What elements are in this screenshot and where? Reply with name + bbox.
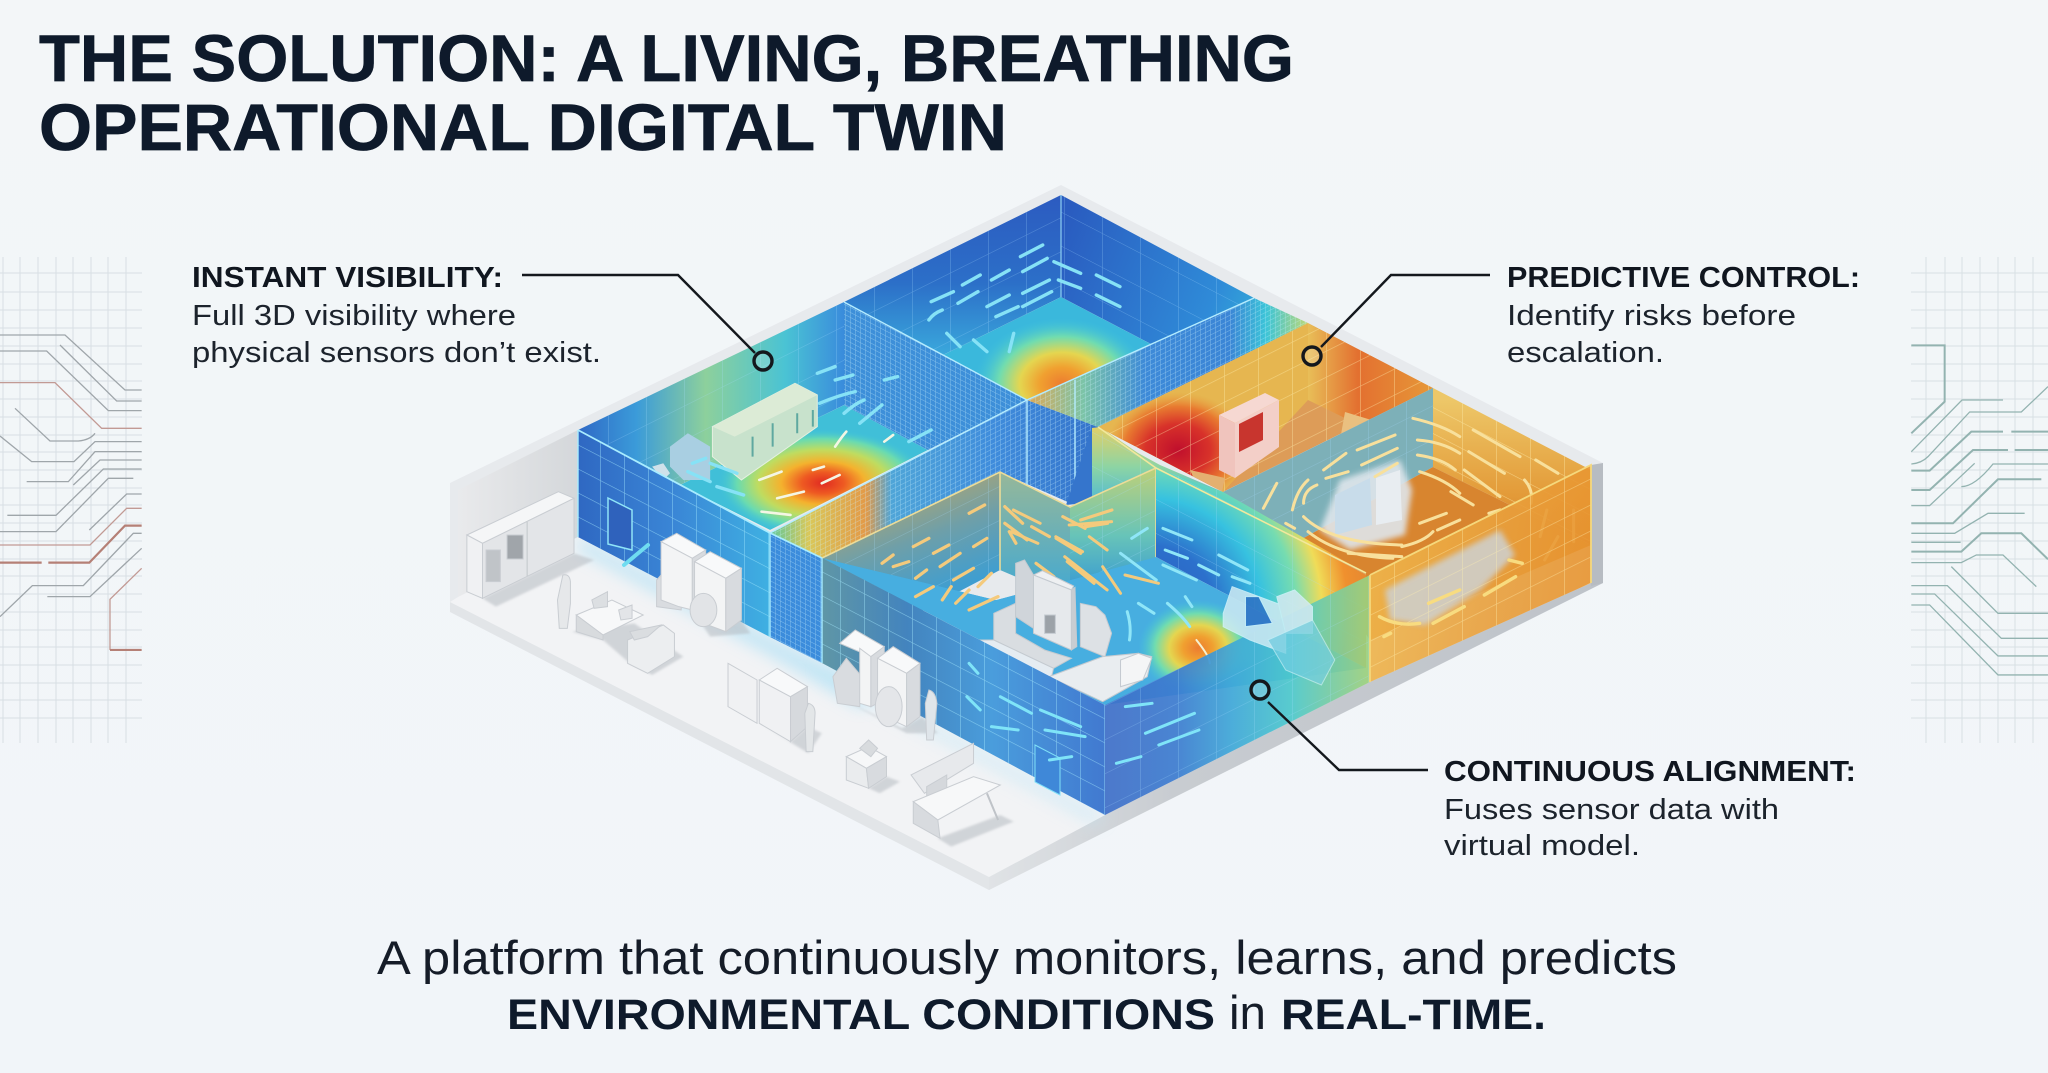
server cabinets xyxy=(467,492,574,598)
title: OPERATIONAL DIGITAL TWIN xyxy=(39,90,1007,164)
front-right wall with grid xyxy=(1105,575,1370,815)
lab table xyxy=(576,592,674,673)
bottom statement: A platform that continuously monitors, learns, and predicts xyxy=(377,931,1677,984)
callout: continuous alignment xyxy=(1251,681,1856,862)
callout: predictive control: escalation. xyxy=(1507,337,1664,369)
twin refrigerators near wall xyxy=(657,533,741,632)
cyan arrows on the front wall xyxy=(967,663,1199,763)
bottom statement xyxy=(377,931,1677,1039)
room B floor hotspot xyxy=(944,297,1150,400)
bottom statement: in xyxy=(1229,986,1266,1039)
room E airflow arrows xyxy=(1263,418,1574,560)
bottom statement: REAL-TIME. xyxy=(1281,991,1546,1039)
title xyxy=(39,21,1294,164)
callout: instant visibility: INSTANT VISIBILITY: xyxy=(192,262,503,294)
central machinery xyxy=(964,560,1152,702)
left circuit decoration xyxy=(0,257,142,743)
room C back walls xyxy=(822,468,1156,620)
room B back walls xyxy=(844,195,1254,355)
callout: predictive control: PREDICTIVE CONTROL: xyxy=(1507,262,1860,294)
callout: instant visibility: physical sensors don’t exist. xyxy=(192,337,601,369)
callout: continuous alignment: Fuses sensor data with xyxy=(1444,794,1779,826)
blue airflow arrows in rooms A and B xyxy=(688,245,1120,515)
bottom statement: ENVIRONMENTAL CONDITIONS xyxy=(507,991,1215,1039)
isometric digital twin building xyxy=(450,185,1603,890)
room A back wall with heat map xyxy=(578,302,844,522)
callout: instant visibility: Full 3D visibility where xyxy=(192,300,516,332)
soft shadows xyxy=(482,553,1014,847)
white equipment on the open floor xyxy=(467,492,1014,847)
room D high-temperature zone xyxy=(1098,323,1433,508)
orange wall airflow arrows xyxy=(1379,560,1522,637)
room F mixed airflow arrows xyxy=(1011,510,1250,663)
callout: predictive control xyxy=(1303,262,1860,369)
left partition with grid xyxy=(578,430,822,663)
right circuit decoration xyxy=(1911,257,2048,743)
twin refrigerators centre xyxy=(833,630,937,740)
room A floor hotspot xyxy=(680,405,928,537)
translucent machine behind the front-right wall xyxy=(1223,587,1335,685)
desk with monitors xyxy=(911,743,1000,838)
front-left wall with grid xyxy=(822,558,1105,815)
small cart xyxy=(846,740,886,788)
room C/F floor with hotspot xyxy=(822,557,1366,705)
rainbow heat-map wall xyxy=(1098,427,1366,668)
cabinets in room A xyxy=(652,383,817,480)
title: THE SOLUTION: A LIVING, BREATHING xyxy=(39,21,1294,95)
callout: instant visibility xyxy=(192,262,772,370)
front-right orange wall xyxy=(1370,465,1591,682)
callout: continuous alignment: CONTINUOUS ALIGNMENT: xyxy=(1444,756,1856,788)
mesh partitions xyxy=(770,298,1308,558)
room E teal wall and floor xyxy=(1223,388,1591,640)
callout: predictive control: Identify risks before xyxy=(1507,300,1796,332)
twin cabinets with figure xyxy=(728,663,815,752)
room C airflow arrows xyxy=(882,505,1112,610)
callout: continuous alignment: virtual model. xyxy=(1444,830,1640,862)
floor slab xyxy=(450,185,1603,890)
standing figure xyxy=(557,575,570,628)
pink cabinet xyxy=(1219,393,1279,478)
